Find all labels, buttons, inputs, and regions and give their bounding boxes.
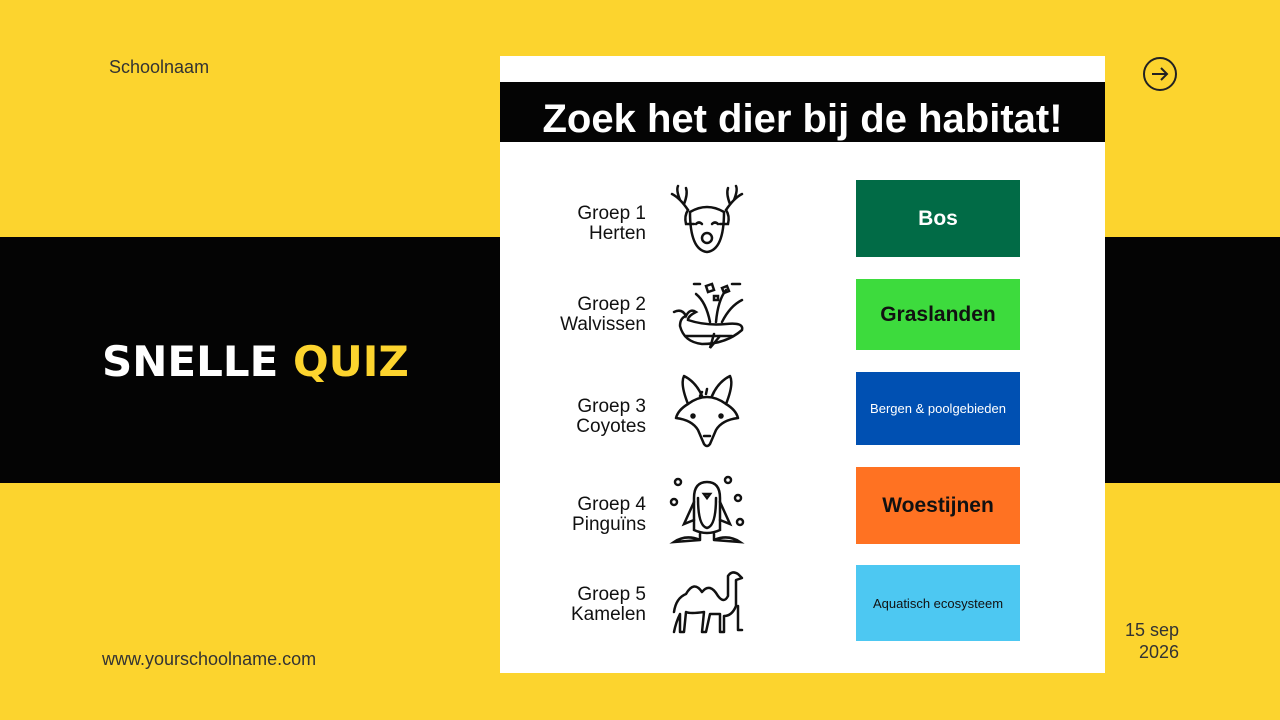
label: group 3: Groep 3 <box>577 396 646 417</box>
icon: camel <box>672 571 744 634</box>
icon: coyote <box>674 374 740 448</box>
box: Bos <box>856 180 1020 257</box>
label: group 5: Groep 5 <box>577 584 646 605</box>
box: Bergen & poolgebieden: Bergen & poolgebieden <box>870 401 1006 416</box>
school name: Schoolnaam <box>109 57 209 77</box>
date: 2026 <box>1139 642 1179 662</box>
label: group 1 <box>577 203 646 244</box>
label: group 2 <box>560 294 646 335</box>
box: Bergen & poolgebieden <box>856 372 1020 445</box>
label: group 3 <box>576 396 646 437</box>
label: group 1: Groep 1 <box>577 203 646 224</box>
box: Woestijnen: Woestijnen <box>882 494 994 516</box>
label: group 4: Pinguïns <box>572 514 646 535</box>
icon: whale <box>672 282 744 349</box>
label: group 5 <box>571 584 646 625</box>
box: Aquatisch ecosysteem <box>856 565 1020 641</box>
date <box>1125 620 1179 662</box>
icon: penguin <box>670 476 744 544</box>
label: group 5: Kamelen <box>571 604 646 625</box>
black band <box>0 237 1280 483</box>
quiz title: SNELLE QUIZ <box>102 337 409 386</box>
label: group 1: Herten <box>589 223 646 244</box>
panel: quiz card <box>500 56 1105 673</box>
label: group 2: Walvissen <box>560 314 646 335</box>
label: group 4 <box>572 494 646 535</box>
label: group 4: Groep 4 <box>577 494 646 515</box>
label: group 2: Groep 2 <box>577 294 646 315</box>
icon: deer <box>670 184 744 254</box>
website: www.yourschoolname.com <box>102 649 316 669</box>
box: Graslanden <box>856 279 1020 350</box>
box: Aquatisch ecosysteem: Aquatisch ecosysteem <box>873 596 1003 610</box>
heading bar: Zoek het dier bij de habitat! <box>542 97 1063 141</box>
date: 15 sep <box>1125 620 1179 640</box>
icon: arrow button <box>1143 57 1177 91</box>
box: Bos: Bos <box>918 206 958 230</box>
label: group 3: Coyotes <box>576 416 646 437</box>
box: Woestijnen <box>856 467 1020 544</box>
box: Graslanden: Graslanden <box>880 302 996 326</box>
heading bar <box>500 82 1105 142</box>
